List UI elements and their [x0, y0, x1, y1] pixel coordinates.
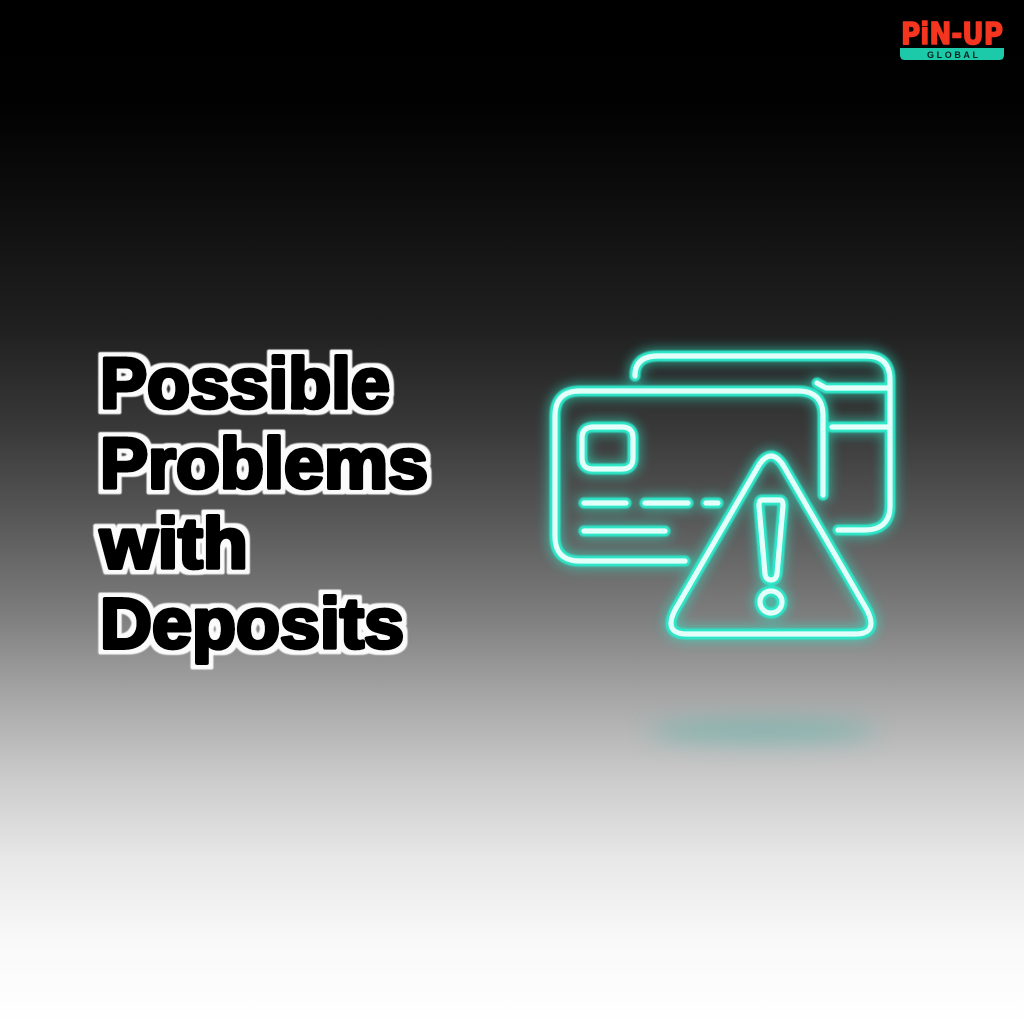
- logo: Pin-Up Global: [900, 17, 1004, 60]
- logo subtitle: GLOBAL: [927, 50, 978, 60]
- title: Deposits: [100, 585, 404, 664]
- icon reflection glow: [647, 721, 877, 741]
- logo teal bar: [900, 48, 1004, 60]
- icon: neon credit cards with warning triangle: [555, 356, 890, 634]
- logo wordmark: PiN-UP: [901, 17, 1003, 52]
- title: Possible: [100, 345, 390, 424]
- title: with: [99, 505, 248, 584]
- title: Problems: [100, 425, 428, 504]
